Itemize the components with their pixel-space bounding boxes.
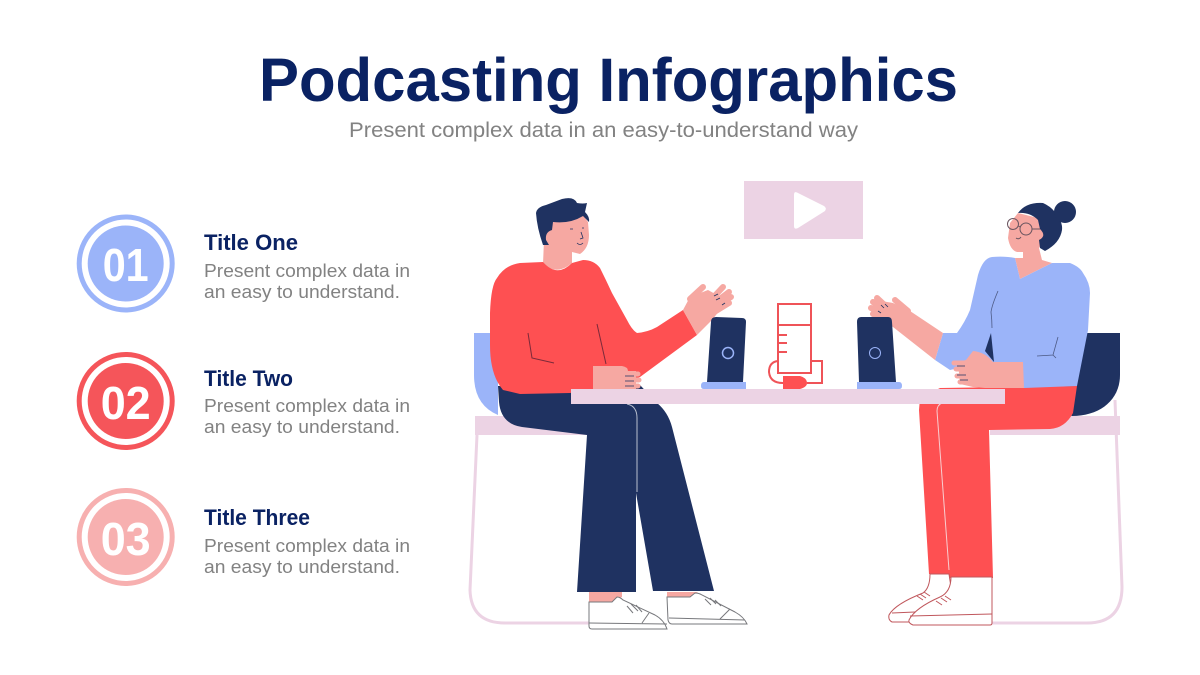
subtitle: Present complex data in an easy-to-understand way [349, 119, 859, 142]
table [571, 389, 1005, 404]
list item 01: Present complex data in [204, 261, 410, 281]
list item 02: Present complex data in [204, 396, 410, 416]
list item 02: 02 [101, 377, 151, 429]
list item 02: an easy to understand. [204, 417, 400, 437]
man face details [570, 228, 584, 244]
woman hair [1018, 203, 1062, 251]
woman glasses [1008, 218, 1040, 239]
left speaker [701, 317, 746, 389]
woman lower hand [954, 351, 1024, 388]
man raised hand [683, 287, 731, 335]
man hair [536, 198, 589, 245]
woman trousers [919, 386, 1077, 578]
list item 01: 01 [103, 239, 149, 291]
man figure [490, 198, 747, 629]
right chair [985, 333, 1122, 623]
title: Podcasting Infographics [259, 46, 958, 114]
list item 03: 03 [101, 513, 151, 565]
list item 03 [79, 490, 410, 584]
list item 02 [79, 354, 410, 448]
list item 03: Title Three [204, 505, 310, 530]
list item 03: Present complex data in [204, 536, 410, 556]
man left shoe [589, 597, 667, 629]
list item 03: an easy to understand. [204, 557, 400, 577]
woman raised arm [871, 298, 943, 360]
man ankles [589, 592, 698, 602]
list item 02: Title Two [204, 366, 293, 391]
left chair [470, 333, 590, 623]
microphone device with cable [769, 304, 822, 389]
chair back showing between arm and torso [985, 333, 994, 362]
woman hair bun [1054, 201, 1076, 223]
woman figure [871, 201, 1090, 625]
woman neck and face [1008, 213, 1052, 279]
man cup hand [593, 366, 639, 389]
man sweater [490, 260, 697, 394]
icon: video play box [744, 181, 863, 239]
right speaker [857, 317, 902, 389]
woman back shoe [889, 574, 951, 622]
man right shoe [667, 593, 747, 624]
man neck and head [543, 215, 589, 270]
man trousers [498, 385, 714, 592]
list item 01: an easy to understand. [204, 282, 400, 302]
woman sweater [935, 257, 1090, 388]
list item 01: Title One [204, 230, 298, 255]
woman front shoe [909, 577, 992, 625]
list item 01 [79, 217, 410, 310]
